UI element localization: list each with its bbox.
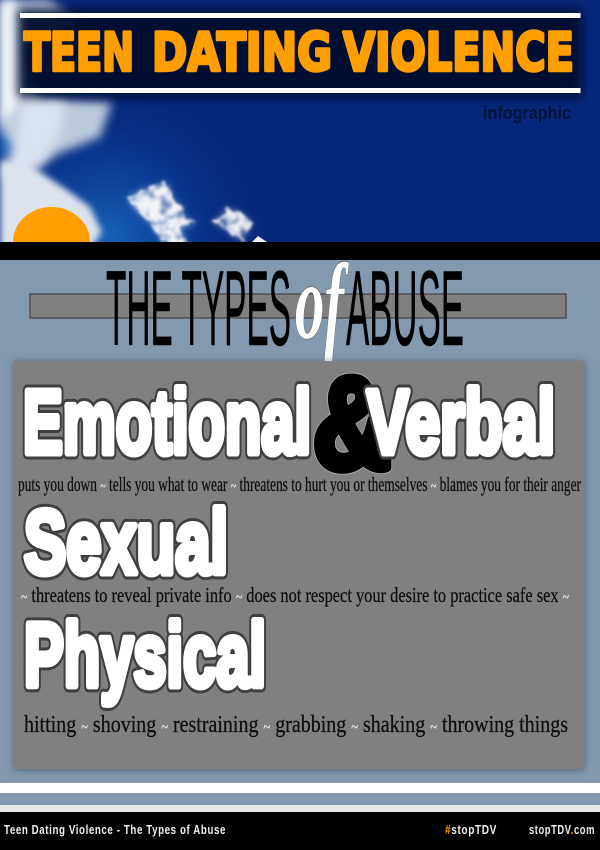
heading: emotional (23, 373, 311, 473)
heading: physical (24, 606, 266, 706)
heading: the types of abuse: of (295, 243, 349, 362)
title (24, 22, 574, 84)
banner rule bottom (20, 88, 580, 93)
footer title: Teen Dating Violence - The Types of Abuse (4, 822, 226, 837)
heading: physical: Physical (24, 606, 266, 706)
footer white band (0, 783, 600, 793)
heading: sexual: Sexual (24, 493, 228, 593)
title banner shadow (18, 9, 582, 97)
panel shadow (14, 362, 584, 770)
infographic label: infographic (483, 103, 571, 123)
panel: types of abuse (14, 350, 584, 769)
title: DATING (152, 22, 332, 84)
text: physical behaviours: hitting ~ shoving ~ restraining ~ grabbing ~ shaking ~ throwing things (24, 712, 568, 738)
heading: emotional: Emotional (23, 373, 311, 473)
footer hashtag: #stopTDV (445, 822, 497, 837)
banner rule top (20, 13, 580, 18)
title: TEEN (24, 22, 134, 84)
header sky with clouds (0, 0, 600, 250)
heading: sexual: Sexual (24, 493, 228, 593)
footer (0, 812, 600, 850)
icon: ampersand: & (313, 350, 391, 496)
footer light band (0, 805, 600, 812)
icon: ampersand: & (313, 350, 391, 496)
icon: setting sun (13, 207, 90, 242)
heading: emotional: Emotional (23, 373, 311, 473)
heading bar (30, 294, 566, 318)
horizon band (0, 242, 600, 260)
heading: physical: Physical (24, 606, 266, 706)
